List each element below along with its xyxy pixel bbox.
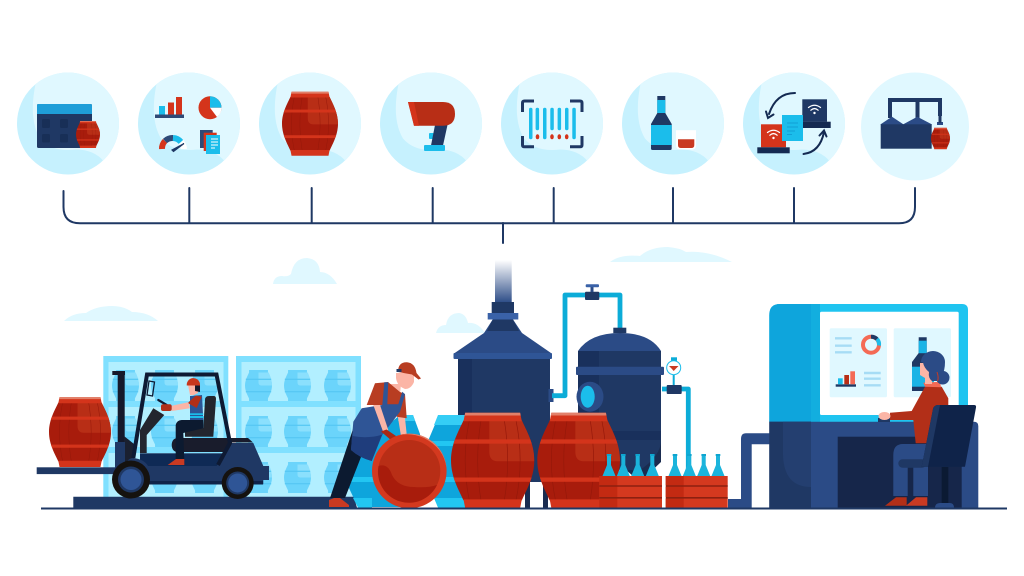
rear wheel	[222, 467, 254, 499]
clouds	[64, 247, 732, 333]
bottle crates	[599, 454, 728, 508]
icon: bottle and glass	[622, 64, 733, 184]
gauge and side pipe	[662, 357, 688, 470]
porthole	[576, 382, 604, 412]
front arm	[373, 405, 388, 432]
icon: wireless data exchange	[743, 64, 854, 184]
icon: charts and documents	[138, 64, 249, 184]
cabinet upper	[769, 304, 968, 422]
cyan barrels behind worker	[348, 415, 470, 508]
legs	[330, 426, 372, 498]
shelf: right rack	[236, 356, 361, 497]
cabinet lower	[769, 422, 978, 508]
chair	[898, 405, 976, 508]
pipes: overhead connection	[552, 284, 620, 396]
seat base	[172, 438, 253, 452]
pipe to control station	[728, 433, 770, 508]
forklift	[37, 371, 269, 499]
icon: barcode	[501, 64, 612, 184]
tank: pressure vessel	[576, 328, 664, 482]
cab frame	[133, 374, 230, 465]
connector bracket	[64, 188, 915, 243]
icon: calendar with barrel	[17, 64, 128, 184]
back arm	[398, 416, 407, 436]
head	[396, 362, 421, 389]
screen	[820, 312, 959, 415]
worker pushing barrel	[329, 362, 447, 508]
mast	[112, 371, 134, 470]
head	[920, 351, 950, 385]
panel: bottle	[894, 328, 951, 397]
driver	[161, 378, 203, 465]
infographic canvas	[17, 72, 1007, 510]
control station	[769, 304, 978, 508]
barrel seen from end	[372, 434, 447, 508]
shirt	[367, 382, 407, 418]
floor platform	[73, 497, 357, 508]
icon: barcode scanner	[380, 64, 491, 184]
panel: analytics	[830, 328, 887, 397]
legs	[893, 444, 928, 496]
barrel on forklift	[49, 397, 111, 467]
barrel: large left	[451, 413, 534, 508]
torso	[890, 387, 948, 443]
hand	[878, 412, 890, 420]
icon: barrel	[259, 64, 370, 184]
operator	[878, 351, 950, 506]
icon row	[17, 64, 969, 184]
shelf: left rack	[103, 356, 228, 497]
fork	[37, 467, 117, 474]
neck	[390, 384, 401, 394]
apron	[351, 382, 405, 461]
seat	[185, 396, 216, 437]
keyboard	[878, 418, 890, 422]
steering column	[140, 408, 164, 453]
barrel: large right	[537, 413, 620, 508]
lower cabin	[140, 453, 222, 466]
icon: tanks and barrel	[861, 72, 969, 180]
ground line	[41, 508, 1007, 510]
front wheel	[112, 460, 150, 498]
vehicle body	[125, 443, 269, 484]
tank: still with chimney	[454, 260, 554, 508]
